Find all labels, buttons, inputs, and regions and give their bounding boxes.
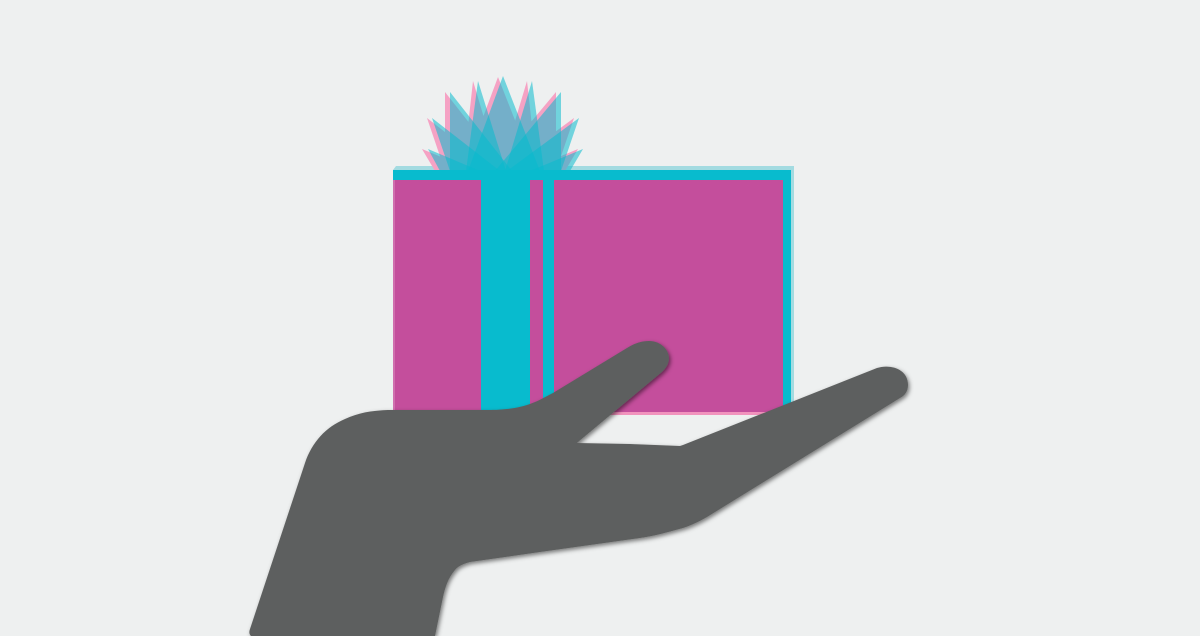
box: pink lower edge: [393, 408, 785, 415]
gift box: [393, 170, 791, 416]
box: magenta left panel: [393, 180, 481, 412]
box: cyan back layer: [393, 170, 791, 410]
bow: pink offset petals: [422, 77, 578, 171]
ribbon: [481, 176, 530, 416]
gift bow: [422, 76, 583, 171]
bow: cyan petals: [428, 76, 583, 171]
box: pale cyan offset: [393, 166, 794, 404]
hand: [249, 341, 908, 636]
box: left highlight: [393, 180, 395, 412]
box: magenta right panel: [554, 180, 783, 412]
box: magenta narrow strip: [530, 180, 543, 412]
